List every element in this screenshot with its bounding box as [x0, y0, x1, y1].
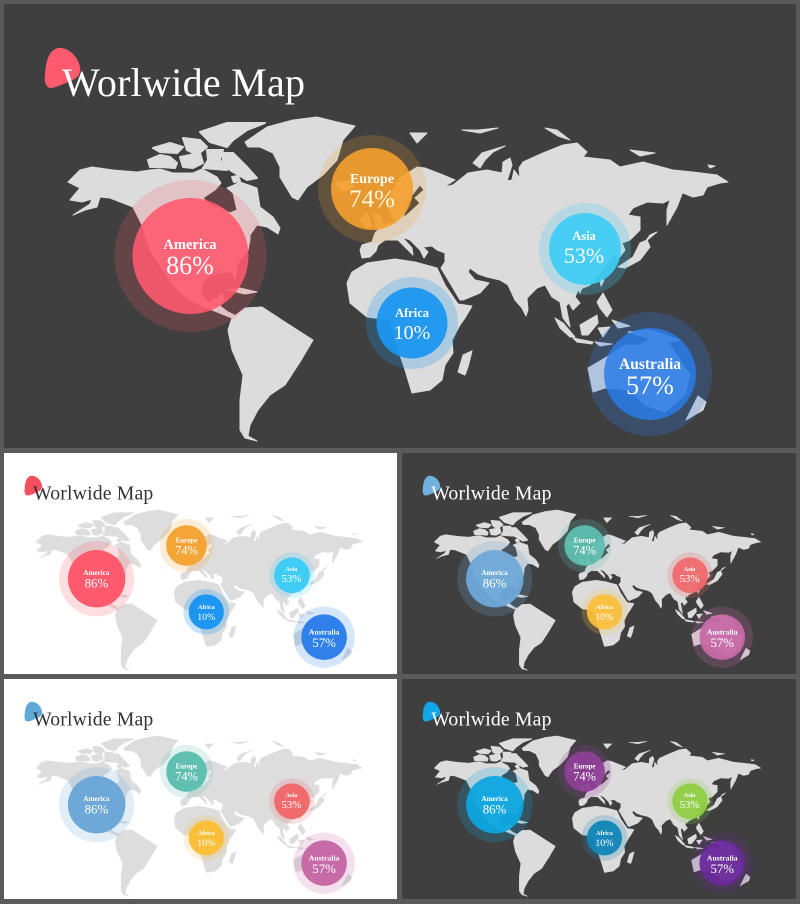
bubble: Asia: Asia [286, 792, 297, 799]
bubble: Europe: Europe [574, 764, 596, 771]
bubble: Africa [582, 589, 627, 635]
bubble: America: 86% [166, 251, 214, 280]
bubble: Asia: 53% [281, 573, 301, 585]
bubble: America: America [163, 237, 217, 253]
bubble: Africa: 10% [595, 838, 613, 849]
bubble: Asia [667, 552, 713, 598]
bubble: Australia [293, 832, 355, 894]
bubble: Asia [269, 778, 315, 824]
bubble: Africa: 10% [595, 612, 613, 623]
bubble: Europe: Europe [350, 172, 394, 187]
title accent blob [24, 476, 42, 496]
title accent blob [24, 702, 42, 722]
bubble: Australia [692, 832, 753, 894]
bubble: America: America [481, 569, 508, 577]
bubble: Asia: Asia [572, 229, 597, 243]
bubble: Australia: Australia [707, 854, 738, 863]
world map [434, 736, 761, 896]
bubble: Asia: Asia [684, 792, 695, 799]
bubble: Australia [588, 312, 712, 436]
panel: main dark slide [4, 4, 796, 448]
bubble: Europe: 74% [349, 186, 395, 213]
world map [36, 510, 363, 670]
bubble: America: 86% [85, 803, 108, 817]
bubble: Europe [558, 519, 611, 572]
bubble: America [59, 541, 134, 616]
bubble: Asia: Asia [286, 566, 297, 573]
bubble: Asia: 53% [564, 243, 604, 268]
bubble: Australia: 57% [312, 862, 336, 876]
bubble: America: 86% [483, 803, 507, 817]
bubble: Africa [366, 277, 458, 369]
bubble: Africa [184, 815, 229, 861]
bubble: Africa: Africa [395, 306, 430, 320]
bubble: Africa: 10% [197, 612, 215, 623]
bubble: Europe: Europe [574, 538, 596, 545]
title: Worlwide Map [62, 60, 305, 105]
slide contents [24, 702, 363, 896]
panel: dark slide, muted palette [402, 453, 796, 674]
bubble: America: America [83, 795, 110, 803]
panel background [402, 679, 796, 899]
panel background [402, 453, 796, 674]
bubble: America [457, 767, 532, 842]
slide contents [423, 476, 761, 670]
bubble: Europe: Europe [176, 764, 197, 771]
world map [36, 736, 363, 896]
bubble: Australia [293, 606, 355, 668]
bubble: Australia [692, 606, 753, 668]
bubble: Asia: 53% [680, 573, 700, 585]
bubble: Europe: 74% [175, 543, 198, 557]
bubble: Australia: 57% [710, 862, 734, 876]
panel: dark slide, vivid palette [402, 679, 796, 899]
title: Worlwide Map [431, 483, 552, 505]
bubble: Asia [269, 552, 315, 598]
bubble: Asia: 53% [281, 799, 301, 811]
bubble: America: America [83, 569, 110, 577]
bubble: Australia: 57% [710, 636, 734, 650]
slide contents [24, 476, 363, 670]
bubble: Africa: Africa [596, 604, 613, 611]
bubble: Australia: Australia [309, 854, 340, 863]
bubble: Africa [582, 815, 627, 861]
title: Worlwide Map [33, 483, 153, 505]
bubble: Europe [558, 745, 611, 798]
slide contents [423, 702, 761, 896]
world map [68, 117, 728, 441]
title: Worlwide Map [431, 709, 552, 731]
panel background [4, 679, 397, 899]
title accent blob [423, 702, 440, 722]
bubble: Europe [318, 135, 426, 243]
bubble: Africa: Africa [198, 830, 215, 837]
bubble: Europe: 74% [175, 769, 198, 783]
bubble: America: 86% [85, 577, 108, 591]
bubble: Australia: Australia [309, 628, 340, 637]
title: Worlwide Map [33, 709, 153, 731]
title accent blob [423, 476, 440, 496]
bubble: Asia: Asia [684, 566, 695, 573]
bubble: Africa [184, 589, 229, 635]
main panel background [4, 4, 796, 448]
world map [434, 510, 761, 670]
bubble: Europe: 74% [573, 769, 596, 783]
bubble: Australia: 57% [626, 371, 674, 400]
bubble: America: America [481, 795, 508, 803]
bubble: Australia: Australia [707, 628, 738, 637]
bubble: Europe: Europe [176, 538, 197, 545]
panel background [4, 453, 397, 674]
bubble: Australia: 57% [312, 636, 336, 650]
bubble: Europe: 74% [573, 543, 596, 557]
bubble: America [59, 767, 134, 842]
bubble: Europe [160, 519, 213, 572]
bubble: Asia [667, 778, 713, 824]
bubble: Asia [539, 203, 631, 295]
bubble: Africa: Africa [198, 604, 215, 611]
bubble: Africa: 10% [197, 838, 215, 849]
bubble: Africa: 10% [394, 322, 430, 344]
bubble: Asia: 53% [680, 799, 700, 811]
bubble: Europe [160, 745, 213, 798]
bubble: America [114, 180, 266, 332]
bubble: America: 86% [483, 577, 507, 591]
bubble: Australia: Australia [619, 356, 681, 373]
title accent blob [45, 48, 80, 88]
bubble: Africa: Africa [596, 830, 613, 837]
panel: white slide, warm palette [4, 453, 397, 674]
panel: white slide, muted palette [4, 679, 397, 899]
bubble: America [457, 541, 532, 616]
